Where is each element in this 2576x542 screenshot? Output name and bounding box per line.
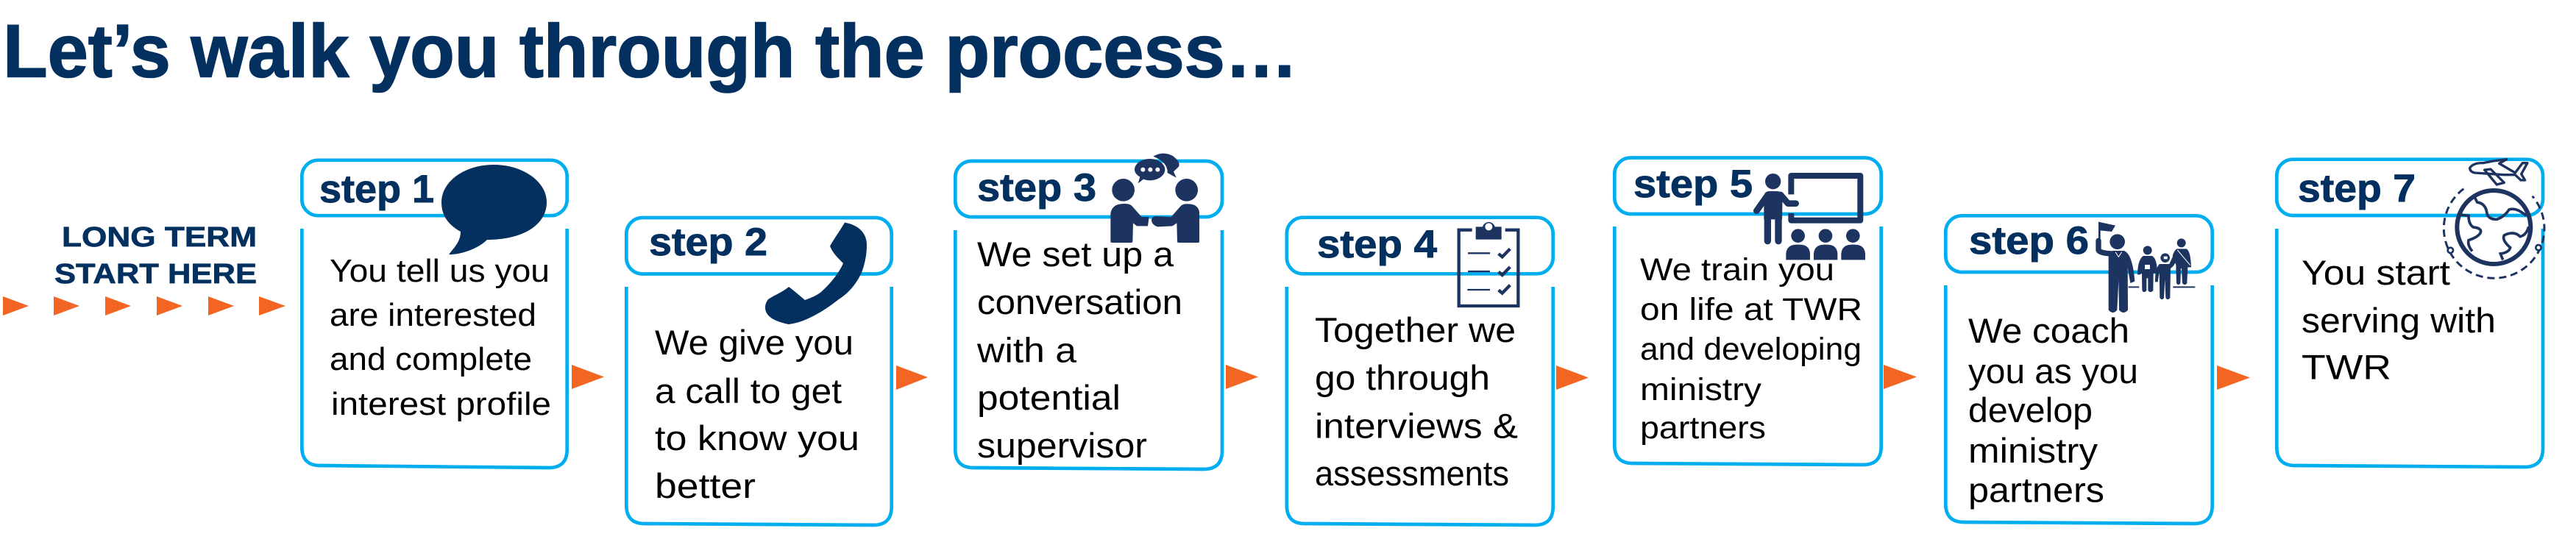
panel: step 5: on life at TWR [1640,292,1862,327]
panel: step 6 [1945,215,2213,524]
icon: globe and plane [2444,160,2544,278]
panel: step 6: step 6 [1969,219,2089,263]
panel: step 5: ministry [1640,372,1762,407]
panel: step 5: and developing [1640,332,1862,367]
panel: step 2: step 2 [649,221,767,264]
panel: step 6: partners [1968,471,2104,510]
panel: step 4: Together we [1315,310,1516,349]
panel: step 6: ministry [1968,431,2098,470]
panel: step 4: go through [1315,358,1490,397]
start here label: START HERE [54,259,257,290]
panel: step 2: to know you [655,418,859,457]
panel: step 7 [2277,160,2543,467]
panel: step 6: develop [1968,391,2093,429]
icon: guide with flag and group [2098,222,2195,313]
panel: step 7: TWR [2302,348,2391,387]
panel: step 4: step 4 [1317,223,1438,266]
panel: step 5: step 5 [1633,163,1753,206]
panel: step 1 [302,160,567,468]
panel: step 3 [955,161,1222,469]
arrow: step 1 to 2 [572,365,604,389]
panel: step 6: We coach [1968,311,2129,350]
icon: clipboard checklist [1459,222,1518,306]
arrow: step 2 to 3 [896,366,928,390]
panel: step 1: and complete [330,341,532,377]
panel: step 3: supervisor [977,426,1147,465]
panel: step 5 [1614,157,1881,465]
arrow: step 6 to 7 [2217,366,2250,390]
panel: step 7: step 7 [2298,167,2416,210]
icon: telephone handset [765,223,867,324]
title: Let’s walk you through the process… [3,10,1298,93]
panel: step 4 [1287,218,1553,525]
panel: step 7: You start [2302,253,2450,292]
arrow: step 4 to 5 [1556,366,1589,390]
panel: step 1: You tell us you [330,253,550,289]
icon: speech bubble [441,165,547,254]
panel: step 7: serving with [2302,301,2496,340]
icon: two people talking [1110,154,1199,243]
panel: step 4: interviews & [1315,407,1518,446]
panel: step 5: We train you [1640,252,1834,288]
panel: step 2 [626,218,892,525]
panel: step 1: step 1 [319,168,434,211]
panel: step 5: partners [1640,410,1766,446]
panel: step 4: assessments [1315,454,1509,493]
panel: step 1: are interested [330,297,536,333]
panel: step 2: We give you [655,323,854,362]
panel: step 2: better [655,466,756,505]
arrow: step 3 to 4 [1226,365,1258,389]
icon: teacher with board and audience [1756,174,1865,260]
panel: step 3: potential [977,378,1121,417]
small arrows: start here [3,296,285,315]
panel: step 3: step 3 [977,166,1096,210]
panel: step 1: interest profile [331,386,551,422]
panel: step 6: you as you [1968,352,2138,391]
start here label: LONG TERM [62,222,257,253]
panel: step 3: We set up a [977,235,1174,274]
arrow: step 5 to 6 [1884,365,1917,389]
panel: step 2: a call to get [655,371,842,410]
panel: step 3: conversation [977,282,1182,321]
start here label [54,222,257,290]
panel: step 3: with a [976,331,1077,370]
